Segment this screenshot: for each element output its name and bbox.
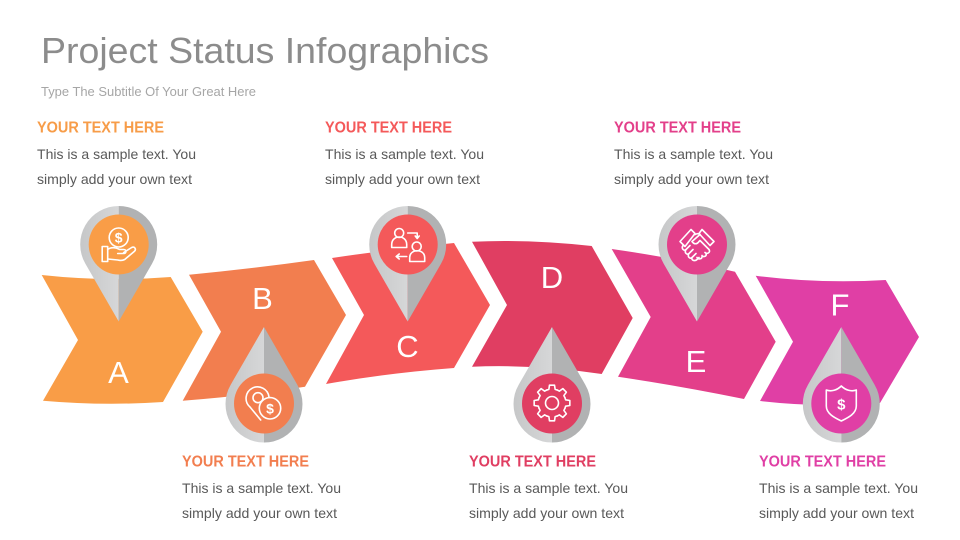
icon: people exchange bbox=[392, 228, 425, 262]
pin C with people exchange icon bbox=[369, 206, 446, 322]
icon: shield with dollar: $ bbox=[837, 396, 846, 414]
pin B with location and coin icon bbox=[226, 327, 302, 442]
text block: top left: simply add your own text bbox=[37, 171, 192, 187]
chevron D bbox=[472, 241, 633, 374]
text block: bottom right: This is a sample text. You bbox=[759, 480, 918, 496]
text block: bottom left: YOUR TEXT HERE bbox=[182, 454, 309, 470]
icon: location and coin: $ bbox=[266, 400, 274, 416]
text block: top left bbox=[37, 120, 196, 187]
text block: bottom middle bbox=[469, 454, 628, 521]
chevron B bbox=[183, 260, 346, 401]
chevron A: A bbox=[108, 355, 129, 390]
text block: top right: YOUR TEXT HERE bbox=[614, 120, 741, 136]
text block: top middle: YOUR TEXT HERE bbox=[325, 120, 452, 136]
text block: top middle bbox=[325, 120, 484, 187]
text block: top left: This is a sample text. You bbox=[37, 146, 196, 162]
text block: top right: simply add your own text bbox=[614, 171, 769, 187]
text block: bottom left: simply add your own text bbox=[182, 505, 337, 521]
icon: hand holding coin: $ bbox=[115, 230, 123, 246]
pin D with gear icon bbox=[514, 327, 590, 442]
chevron A bbox=[42, 275, 203, 404]
pin F with shield icon bbox=[803, 327, 880, 442]
text block: bottom middle: This is a sample text. You bbox=[469, 480, 628, 496]
text block: bottom middle: simply add your own text bbox=[469, 505, 624, 521]
text block: top middle: This is a sample text. You bbox=[325, 146, 484, 162]
chevron F: F bbox=[831, 288, 849, 322]
chevron B: B bbox=[252, 281, 273, 316]
chevron D: D bbox=[541, 260, 563, 295]
pin E with handshake icon bbox=[659, 206, 735, 322]
chevron C: C bbox=[396, 329, 419, 364]
icon: gear bbox=[534, 385, 570, 421]
text block: bottom right: simply add your own text bbox=[759, 505, 914, 521]
text block: bottom left bbox=[182, 454, 341, 521]
text block: bottom left: This is a sample text. You bbox=[182, 480, 341, 496]
text block: top right: This is a sample text. You bbox=[614, 146, 773, 162]
pin A with hand and coin icon bbox=[80, 206, 157, 322]
chevron E bbox=[612, 249, 776, 399]
chevron E: E bbox=[686, 344, 706, 379]
chevron C bbox=[326, 243, 490, 384]
text block: bottom right bbox=[759, 454, 918, 521]
text block: top right bbox=[614, 120, 773, 187]
chevron F bbox=[756, 276, 919, 405]
text block: top left: YOUR TEXT HERE bbox=[37, 120, 164, 136]
text block: top middle: simply add your own text bbox=[325, 171, 480, 187]
subtitle: Type The Subtitle Of Your Great Here bbox=[41, 84, 256, 99]
icon: handshake bbox=[680, 230, 714, 261]
text block: bottom right: YOUR TEXT HERE bbox=[759, 454, 886, 470]
title: Project Status Infographics bbox=[41, 30, 489, 71]
text block: bottom middle: YOUR TEXT HERE bbox=[469, 454, 596, 470]
